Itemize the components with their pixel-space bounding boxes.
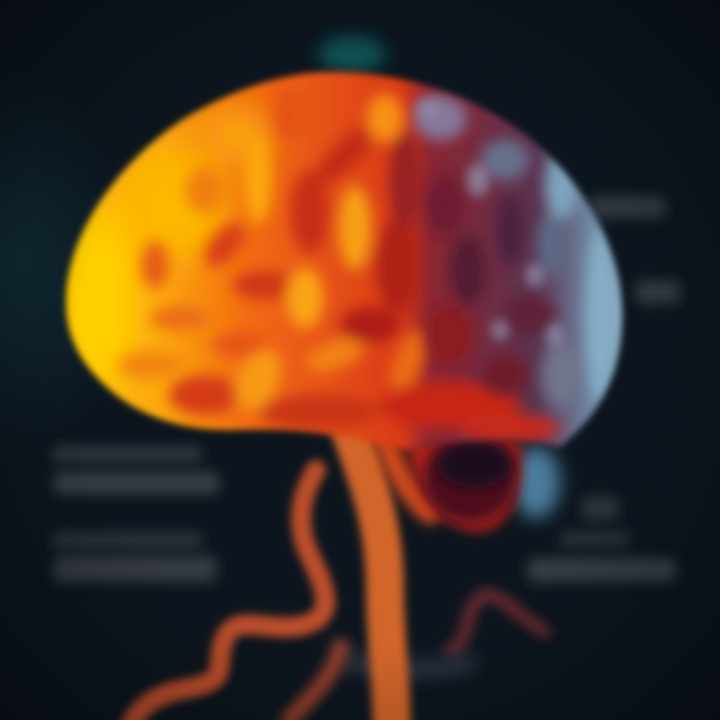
middle: orange and red folds xyxy=(118,87,560,442)
background glow xyxy=(0,70,130,450)
nerve: stem branch to cerebellum xyxy=(385,440,430,512)
right hemisphere: dark red and blue folds xyxy=(414,96,614,407)
text block: lower right label xyxy=(528,496,676,582)
brain folds xyxy=(66,87,614,442)
text block: left label two xyxy=(52,532,216,582)
brain xyxy=(66,72,622,450)
icon: teal stem on top of brain xyxy=(318,36,386,72)
nerve: lower branch xyxy=(285,640,342,720)
cerebellum: dark lower right lobe xyxy=(405,438,560,532)
left hemisphere: yellow highlights xyxy=(66,107,272,385)
nerve: right small wavy strand xyxy=(450,595,545,650)
nerve: faint lower strands xyxy=(345,660,470,669)
text block: left label one xyxy=(52,446,219,494)
label smudges xyxy=(52,196,680,582)
nerve: main brain stem xyxy=(348,425,392,720)
text block: upper right label xyxy=(590,196,666,218)
brain base shape xyxy=(66,72,622,450)
nerve: left wavy strand xyxy=(132,470,326,720)
right hemisphere: small pale spots xyxy=(416,99,563,347)
text block: middle right label xyxy=(636,280,680,304)
